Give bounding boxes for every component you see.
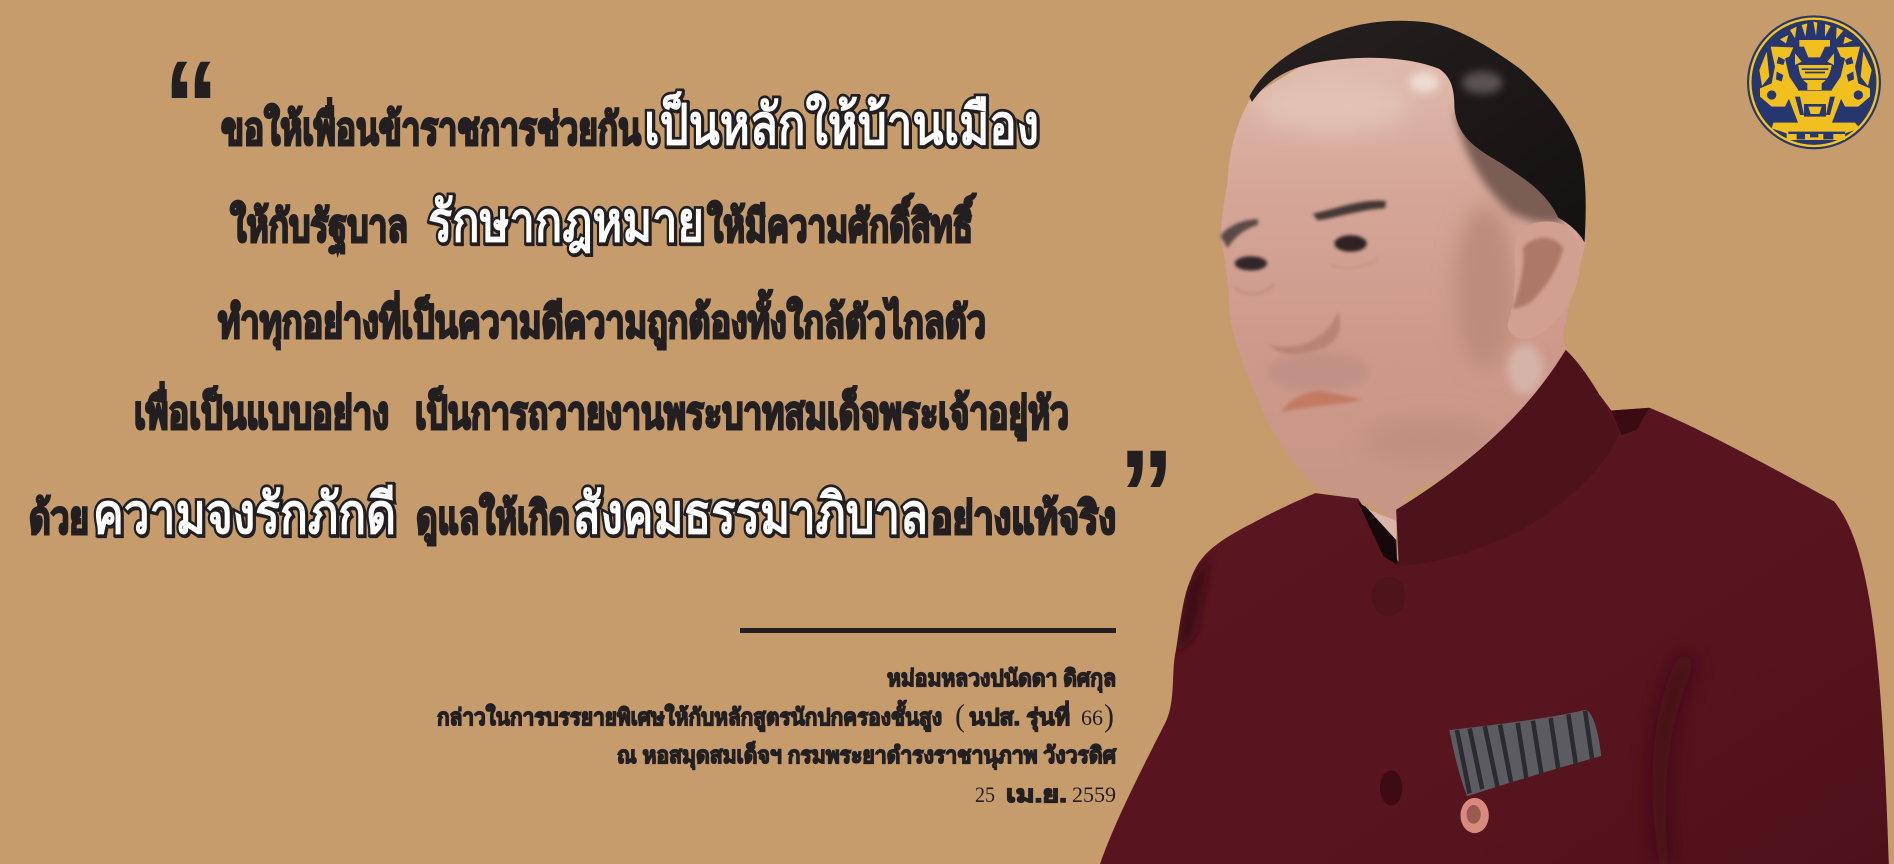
date line: 2559	[1072, 782, 1116, 807]
quote line 4: เพื่อเป็นแบบอย่าง	[134, 382, 389, 438]
pedestal	[1788, 91, 1842, 123]
quote line 5: ด้วย	[29, 494, 89, 543]
quote line 3: ทำทุกอย่างที่เป็นความดีความถูกต้องทั้งใกล้ตัวไกลตัว	[218, 289, 986, 350]
date line	[975, 781, 1116, 807]
occasion line: กล่าวในการบรรยายพิเศษให้กับหลักสูตรนักปกครองชั้นสูง	[437, 700, 942, 732]
date line: เม.ย.	[1006, 781, 1067, 807]
opening quotation mark: “	[164, 35, 219, 178]
quote line 2: รักษากฎหมาย	[428, 190, 704, 253]
quote line 5: ดูแลให้เกิด	[416, 492, 570, 545]
upper bowl	[1799, 40, 1830, 57]
left lion	[1760, 47, 1798, 107]
quote line 1: เป็นหลักให้บ้านเมือง	[644, 90, 1039, 156]
venue line: ณ หอสมุดสมเด็จฯ กรมพระยาดำรงราชานุภาพ วังวรดิศ	[617, 740, 1116, 770]
quote line 5	[29, 482, 1116, 545]
occasion line: (	[955, 697, 965, 733]
collar	[1396, 350, 1620, 566]
lapel pin	[1460, 798, 1489, 833]
government seal logo	[1747, 15, 1881, 149]
eyebrows	[1220, 201, 1386, 248]
occasion line: 66	[1081, 705, 1103, 730]
quote line 2	[230, 190, 976, 254]
quote line 5: ความจงรักภักดี	[93, 482, 396, 545]
occasion line	[437, 697, 1114, 733]
speaker name: หม่อมหลวงปนัดดา ดิศกุล	[887, 665, 1116, 693]
mouth	[1281, 391, 1362, 412]
plinth	[1772, 123, 1860, 140]
eyes	[1234, 235, 1378, 294]
quote line 1	[221, 90, 1039, 156]
quote text	[29, 90, 1116, 545]
quote line 4	[134, 382, 1069, 440]
quote line 1: ขอให้เพื่อนข้าราชการช่วยกัน	[221, 98, 641, 154]
face and neck	[1221, 50, 1586, 543]
occasion line: )	[1104, 697, 1114, 733]
hair	[1249, 21, 1586, 242]
quote line 2: ให้กับรัฐบาล	[230, 200, 408, 254]
flame sides	[1759, 52, 1872, 86]
ear	[1508, 221, 1580, 339]
divider rule	[740, 628, 1116, 633]
flame ring	[1780, 22, 1853, 44]
date line: 25	[975, 782, 995, 807]
quote line 4: เป็นการถวายงานพระบาทสมเด็จพระเจ้าอยู่หัว	[415, 386, 1069, 440]
buttons	[1371, 576, 1406, 806]
occasion line: นปส. รุ่นที่	[969, 700, 1070, 732]
right lion	[1832, 47, 1870, 107]
attribution block	[437, 665, 1116, 807]
shirt collar edge	[1358, 503, 1397, 565]
closing quotation mark: ”	[1119, 424, 1174, 567]
pocket square	[1449, 710, 1601, 796]
quote line 2: ให้มีความศักดิ์สิทธิ์	[707, 193, 976, 251]
nose	[1270, 311, 1340, 354]
lower bowl	[1798, 65, 1832, 90]
quote line 5: อย่างแท้จริง	[931, 494, 1116, 543]
jacket	[1100, 350, 1889, 864]
quote line 5: สังคมธรรมาภิบาล	[573, 482, 928, 545]
person portrait	[1100, 21, 1889, 864]
